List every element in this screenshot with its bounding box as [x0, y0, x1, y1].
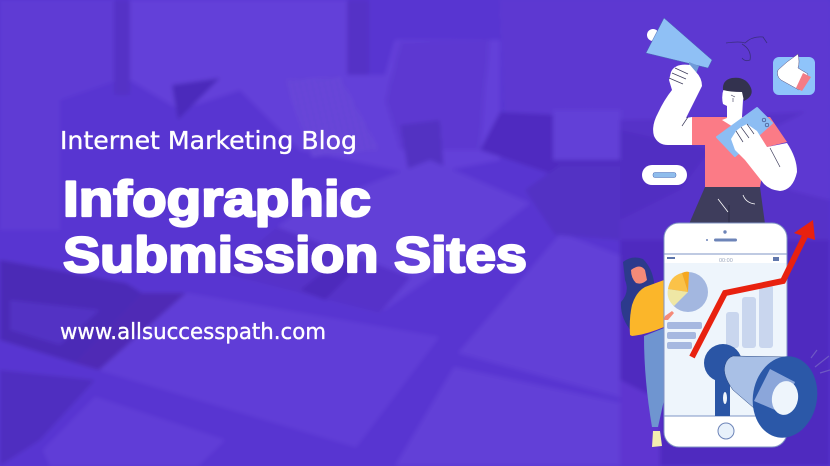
- home button: [718, 423, 734, 439]
- screen: [664, 263, 786, 416]
- title: Infographic Submission Sites: Infographic: [63, 171, 371, 227]
- sound lines: [811, 350, 830, 373]
- phone body: [664, 223, 787, 447]
- status bar: [667, 257, 779, 264]
- status bar: 00:00: [719, 258, 733, 264]
- website address: www.allsuccesspath.com: [60, 320, 326, 345]
- icon: man with megaphone and phone: [646, 18, 797, 224]
- icon: thumbs up badge: [773, 54, 815, 95]
- icon: woman presenting: [621, 258, 664, 447]
- icon: white pill button: [642, 165, 687, 185]
- shirt: [692, 117, 787, 187]
- shoe: [652, 431, 662, 447]
- pie chart: [668, 272, 708, 312]
- title: Infographic Submission Sites: Submission Sites: [63, 227, 527, 283]
- icon: squiggle lines: [726, 37, 767, 61]
- heading: Internet Marketing Blog: Internet Marketing Blog: [60, 126, 357, 155]
- icon: large blue megaphone: [704, 344, 824, 443]
- neck and face: [722, 84, 746, 130]
- red growth arrow: [692, 220, 815, 357]
- trousers: [689, 187, 765, 224]
- raised arm: [653, 65, 702, 145]
- hair: [723, 78, 752, 101]
- face: [631, 266, 647, 284]
- sweater: [630, 280, 664, 336]
- lower arm and hand: [731, 124, 797, 191]
- phone with dashboard: [664, 223, 787, 447]
- list bars: [667, 322, 702, 349]
- trousers: [644, 328, 664, 427]
- bar chart: [726, 285, 773, 348]
- megaphone held by man: [646, 18, 712, 74]
- pointing hand: [664, 311, 674, 320]
- phone: [717, 108, 772, 156]
- hair: [621, 258, 656, 332]
- title: Infographic Submission Sites: [63, 171, 527, 283]
- speaker and camera: [706, 230, 737, 242]
